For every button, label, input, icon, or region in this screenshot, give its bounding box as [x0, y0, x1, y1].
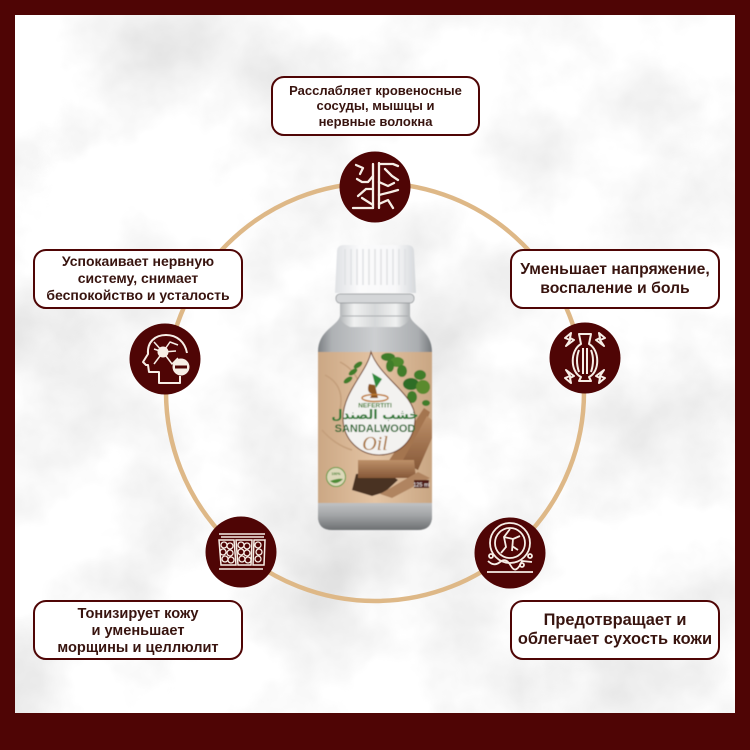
- callout: calms nervous system: Успокаивает нервную: [62, 252, 214, 268]
- callout: tones skin: [33, 600, 243, 660]
- sandalwood sticks: [388, 408, 430, 470]
- callout: prevents dryness: облегчает сухость кожи: [518, 630, 712, 648]
- brand logo: NEFERTITI: [358, 402, 392, 410]
- callout: reduces tension: воспаление и боль: [540, 280, 690, 297]
- callout: tones skin: и уменьшает: [91, 622, 184, 638]
- product name: [331, 408, 419, 455]
- callout: prevents dryness: [510, 600, 720, 660]
- bottle base: [318, 503, 432, 530]
- callout: relaxes vessels: нервные волокна: [319, 114, 432, 129]
- callout: prevents dryness: Предотвращает и: [544, 611, 686, 629]
- callout: calms nervous system: [33, 249, 243, 309]
- ring connecting the benefits: [166, 183, 584, 601]
- product bottle: [318, 245, 432, 530]
- callout: calms nervous system: беспокойство и усталость: [46, 286, 230, 302]
- product name: خشب الصندل: [331, 408, 419, 423]
- product name: Oil: [362, 433, 388, 455]
- icon: cellulite tissue: [206, 516, 276, 588]
- bottle cap: [335, 245, 416, 293]
- icon: muscle with tension: [550, 322, 620, 394]
- leaves: [342, 353, 430, 406]
- callout: reduces tension: [510, 249, 720, 309]
- icon: blood vessels and nerves: [340, 152, 410, 222]
- callout: tones skin: морщины и целлюлит: [57, 640, 219, 656]
- drop shape: [343, 352, 415, 455]
- natural badge: 100%: [332, 472, 341, 476]
- callout: calms nervous system: систему, снимает: [78, 270, 198, 286]
- bottle label: [318, 352, 432, 503]
- product name: SANDALWOOD: [335, 423, 415, 435]
- callout: reduces tension: Уменьшает напряжение,: [520, 261, 710, 278]
- volume tag: 125 ml: [413, 482, 430, 488]
- callout: relaxes vessels: Расслабляет кровеносные: [289, 83, 462, 98]
- natural badge: [326, 468, 346, 486]
- callout: relaxes vessels: [271, 76, 480, 136]
- callout: relaxes vessels: сосуды, мышцы и: [317, 98, 434, 113]
- callout: tones skin: Тонизирует кожу: [77, 606, 198, 622]
- bottle body: [318, 302, 432, 530]
- icon: head with calmed nerve: [130, 324, 200, 394]
- brand logo: [358, 373, 392, 410]
- icon: dry skin: [474, 518, 546, 588]
